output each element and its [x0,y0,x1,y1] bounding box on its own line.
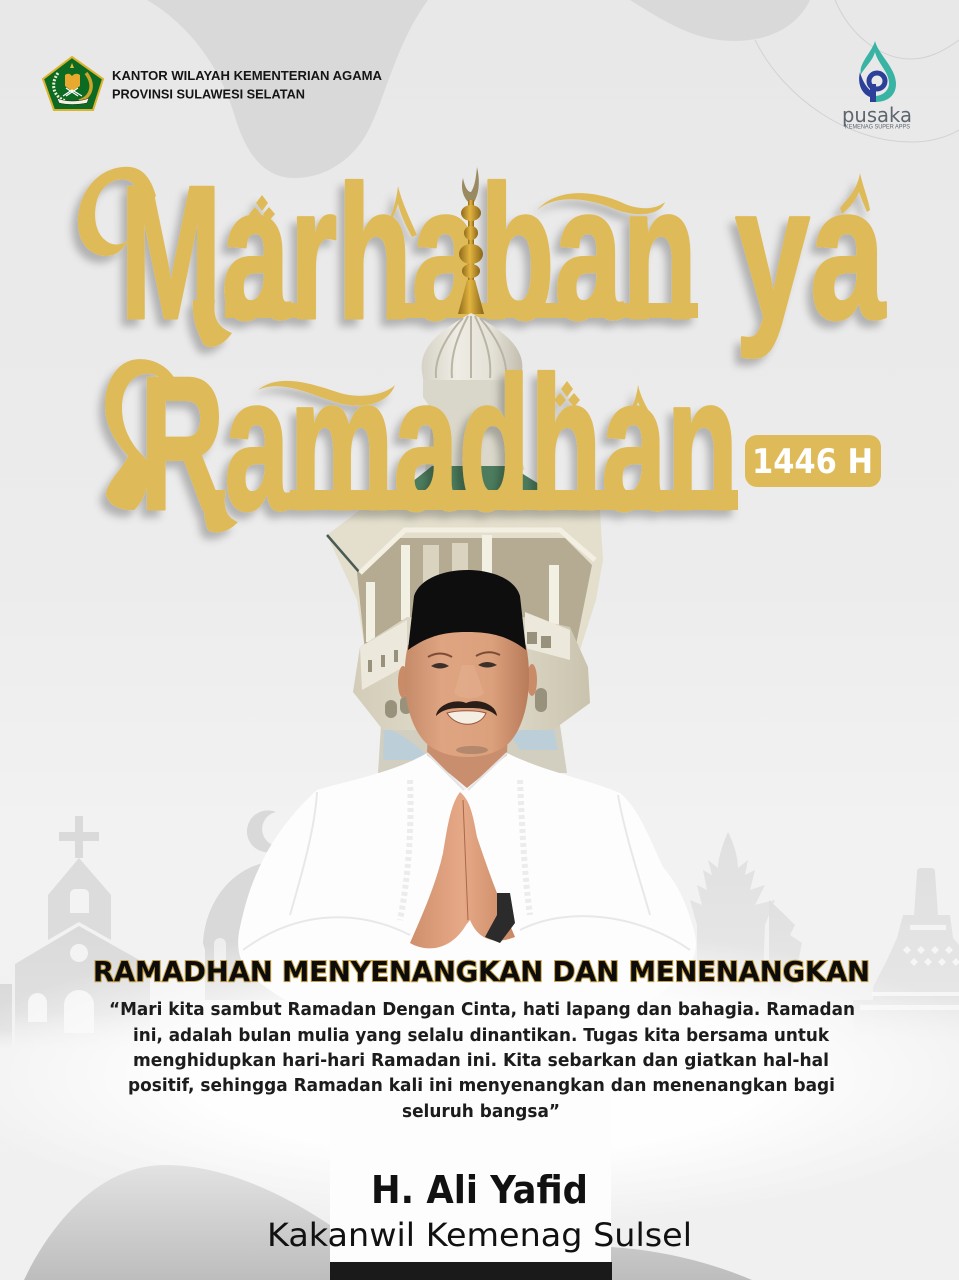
neck [427,725,508,788]
M tail swash [193,300,232,347]
black peci hat [408,570,526,650]
praying hands [410,792,515,948]
man portrait [238,570,696,1280]
header text: KANTOR WILAYAH KEMENTERIAN AGAMA [112,68,383,83]
quote text [109,1000,855,1122]
quote text: seluruh bangsa” [402,1102,560,1122]
logo: Kementerian Agama emblem [43,57,103,110]
connecting stroke a-r [225,303,303,318]
diacritic diamonds [249,195,275,221]
watch [485,893,515,943]
eyes [428,652,500,668]
background shape: top left blob [147,0,428,178]
logo: pusaka [842,41,912,130]
quote text: menghidupkan hari-hari Ramadan ini. Kita sebarkan dan giatkan hal-hal [133,1051,829,1071]
title line: Marhaban ya: ya [735,147,886,359]
R tail swash [204,490,238,533]
year badge: 1446 H [752,442,873,482]
quote text: ini, adalah bulan mulia yang selalu dinantikan. Tugas kita bersama untuk [133,1026,829,1046]
hand centre line [463,800,468,920]
nose [454,665,484,698]
header text [112,68,383,102]
diacritic tilde [537,193,665,214]
R swash loop [105,359,178,510]
minaret balcony [353,612,590,730]
diacritic caret a [385,186,417,237]
M swash loop [78,167,156,256]
minaret dome [422,313,525,470]
silhouette: stupa [853,868,959,1040]
white glow behind text [0,925,959,1225]
connecting stroke [290,490,738,510]
silhouette: mosque dome [203,810,320,1000]
diacritic diamonds [554,381,580,407]
header text: PROVINSI SULAWESI SELATAN [112,86,305,102]
quote text: “Mari kita sambut Ramadan Dengan Cinta, hati lapang dan bahagia. Ramadan [109,1000,855,1020]
trousers [330,1262,612,1280]
background shape: top right blob [630,0,810,41]
role: Kakanwil Kemenag Sulsel [267,1216,692,1254]
minaret lower tower [378,724,567,773]
background shape: bottom blob [24,1165,752,1280]
minaret green roof [402,466,560,515]
name: H. Ali Yafid [371,1168,588,1212]
chin beard [456,746,488,754]
logo: pusaka: pusaka [842,103,912,127]
collar [427,753,507,790]
moustache [436,701,497,716]
minaret canopy [327,510,603,650]
ears [398,664,537,698]
diacritic tilde [258,381,395,406]
white shirt [238,753,696,1262]
silhouette: church [0,816,150,1050]
logo: pusaka: KEMENAG SUPER APPS [845,124,910,130]
face [405,625,529,757]
background shape: thin arcs [755,0,959,142]
slogan heading: RAMADHAN MENYENANGKAN DAN MENENANGKAN [93,955,870,988]
silhouette: pura tower [690,832,802,1000]
minaret gold spire [458,200,484,314]
quote text: positif, sehingga Ramadan kali ini menyenangkan dan menenangkan bagi [128,1076,835,1096]
diacritic caret ya [840,173,870,214]
minaret crescent finial [462,167,479,205]
minaret [327,167,603,773]
diacritic caret [622,385,656,426]
smile [447,711,486,724]
connecting stroke h-a-b-a-n [395,303,698,318]
